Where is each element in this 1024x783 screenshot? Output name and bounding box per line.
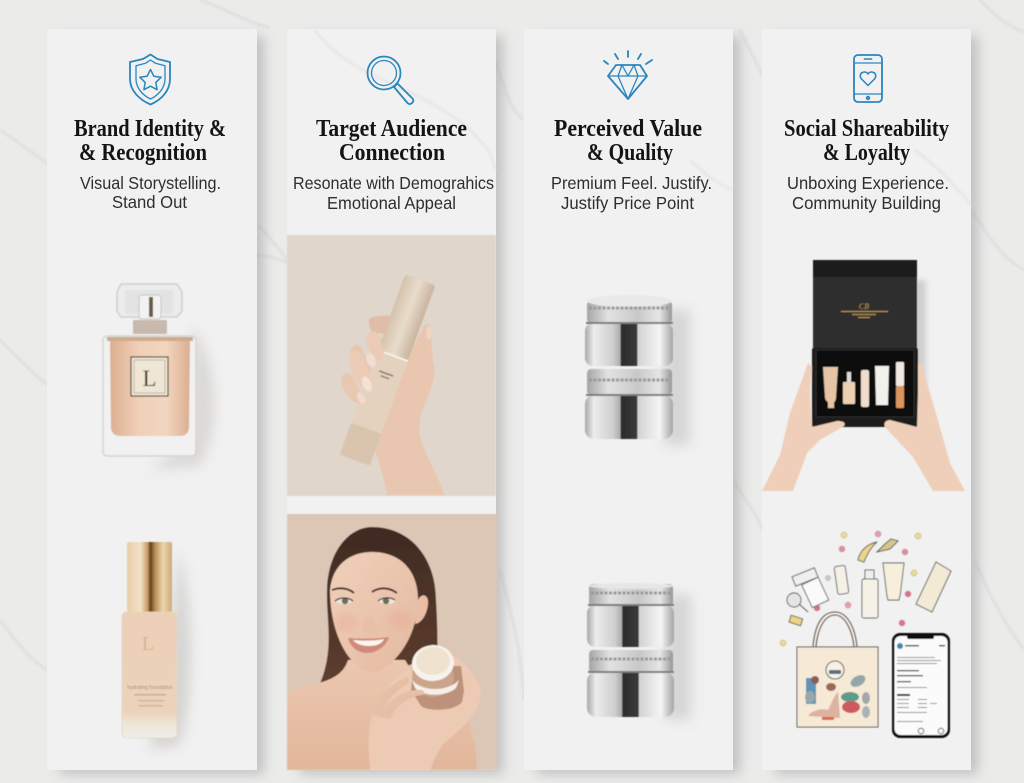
photo: hands opening gift box <box>762 260 965 491</box>
description: Community Building <box>792 193 941 213</box>
description: Justify Price Point <box>561 193 694 213</box>
phone with social post <box>892 633 950 738</box>
description: Stand Out <box>112 192 187 212</box>
hair <box>319 527 438 686</box>
heading: Brand Identity & <box>74 116 226 142</box>
product: foundation bottle: hydrating foundation <box>127 685 173 691</box>
description: Unboxing Experience. <box>787 173 949 193</box>
body <box>287 660 477 770</box>
box lid <box>813 260 917 348</box>
confetti dots <box>780 531 921 646</box>
hand with jar <box>369 650 481 770</box>
tote bag <box>797 612 878 727</box>
label: monogram: L <box>142 366 157 391</box>
fingers over tube <box>366 332 384 360</box>
product: perfume bottle <box>103 284 215 470</box>
heading: Perceived Value <box>554 116 702 142</box>
product: foundation bottle: L <box>142 633 154 655</box>
tube <box>340 274 435 466</box>
photo: woman holding cream jar <box>287 514 497 770</box>
smile <box>348 637 389 653</box>
description <box>293 173 494 213</box>
description <box>80 173 221 212</box>
description: Emotional Appeal <box>327 193 456 213</box>
heading: Social Shareability <box>784 116 949 142</box>
box tray <box>812 348 918 427</box>
heading <box>316 116 467 166</box>
icon: sparkling diamond <box>604 51 652 99</box>
product: foundation bottle <box>122 542 191 750</box>
heading <box>74 116 226 166</box>
panel: target audience connection <box>287 29 497 770</box>
heading <box>554 116 702 166</box>
illustration: social sharing items <box>780 531 951 738</box>
product: stacked chrome jars bottom <box>587 583 691 720</box>
icon: magnifying glass <box>368 56 413 104</box>
box gold logo: CB <box>859 302 869 311</box>
description: Resonate with Demograhics <box>293 173 494 193</box>
mini products <box>823 362 904 408</box>
eyes and brows <box>332 588 397 593</box>
panel: perceived value and quality <box>524 29 733 770</box>
description: Premium Feel. Justify. <box>551 173 712 193</box>
heading: Target Audience <box>316 116 467 142</box>
description <box>551 173 712 213</box>
icon: shield with star <box>130 54 170 104</box>
panel: brand identity and recognition <box>47 29 257 770</box>
heading: & Quality <box>587 140 673 166</box>
box gold logo <box>841 302 888 318</box>
description <box>787 173 949 213</box>
doodle cosmetics <box>787 539 951 626</box>
heading: & Recognition <box>79 140 207 166</box>
hand and wrist <box>375 324 444 495</box>
heading: & Loyalty <box>823 140 910 166</box>
panel: social shareability and loyalty <box>762 29 971 770</box>
heading <box>784 116 949 166</box>
face <box>330 552 418 673</box>
left hand <box>762 363 845 491</box>
icon: phone with heart <box>854 55 882 102</box>
description: Visual Storystelling. <box>80 173 221 193</box>
heading: Connection <box>339 140 445 166</box>
product: stacked chrome jars top <box>585 295 690 445</box>
right hand <box>884 363 965 491</box>
photo: hand holding tube <box>287 235 496 496</box>
